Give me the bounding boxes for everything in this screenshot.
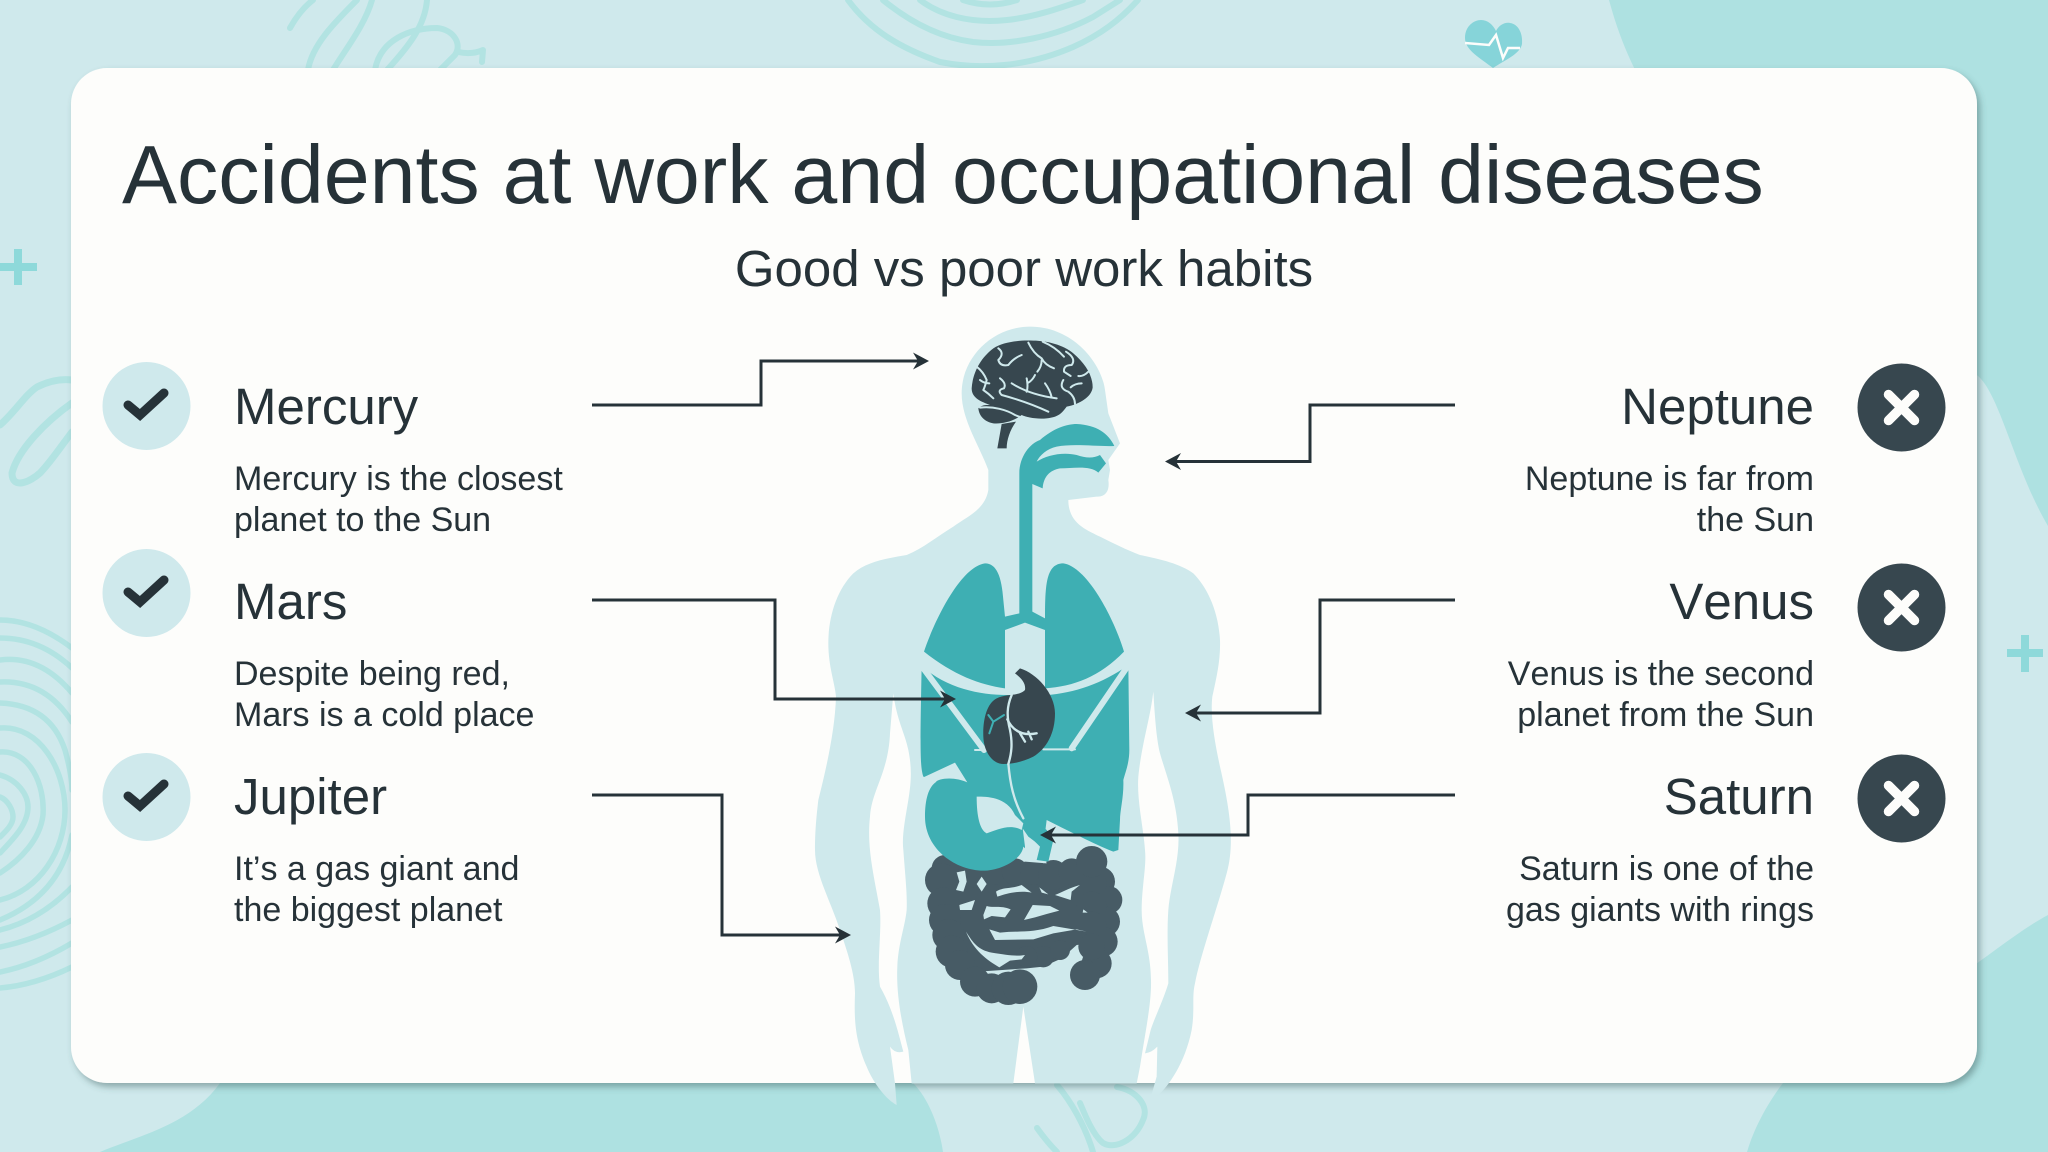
item: Venus [1508, 564, 1946, 734]
description: planet to the Sun [234, 501, 491, 539]
arrow: Venus to arm [1185, 600, 1455, 722]
heading: Jupiter [234, 768, 387, 825]
title: Accidents at work and occupational diseases [122, 129, 1764, 221]
description: Neptune is far from [1525, 460, 1814, 498]
lungs [924, 563, 1124, 688]
heart organ [983, 668, 1055, 764]
item: Saturn [1506, 754, 1946, 929]
heading: Saturn [1664, 768, 1814, 825]
liver and stomach [921, 665, 1129, 877]
description: Despite being red, [234, 655, 510, 693]
description: planet from the Sun [1517, 696, 1814, 734]
icon: cross [1858, 754, 1946, 842]
subtitle: Good vs poor work habits [735, 240, 1313, 297]
description: Venus is the second [1508, 655, 1814, 693]
icon: check [102, 549, 190, 637]
body silhouette [815, 327, 1231, 1105]
arrow: Neptune to mouth [1165, 405, 1455, 470]
description: It’s a gas giant and [234, 850, 519, 888]
heading: Neptune [1621, 378, 1814, 435]
human body illustration [815, 327, 1231, 1105]
heading: Venus [1669, 573, 1814, 630]
brain [972, 341, 1093, 448]
icon: plus right [2007, 635, 2043, 672]
description: the biggest planet [234, 891, 503, 929]
icon: heart bottom [1387, 104, 1444, 152]
icon: cross [1858, 364, 1946, 452]
arrow: Jupiter to arm [592, 795, 851, 944]
icon: check [102, 753, 190, 841]
arrow: Mercury to brain [592, 352, 929, 405]
icon: check [102, 362, 190, 450]
right connector arrows [1040, 405, 1455, 844]
item: Mercury [102, 362, 563, 539]
trachea and airways [1005, 424, 1114, 630]
left connector arrows [592, 352, 956, 944]
icon: plus left [0, 249, 37, 285]
description: Mercury is the closest [234, 460, 563, 498]
description: Mars is a cold place [234, 696, 534, 734]
item: Neptune [1525, 364, 1946, 539]
heading: Mercury [234, 378, 419, 435]
item: Jupiter [102, 753, 519, 929]
item: Mars [102, 549, 534, 734]
icon: cross [1858, 564, 1946, 652]
arrow: Saturn to organ [1040, 795, 1455, 844]
description: Saturn is one of the [1519, 850, 1814, 888]
description: gas giants with rings [1506, 891, 1814, 929]
icon: heart top [1465, 20, 1522, 68]
arrow: Mars to torso [592, 600, 956, 708]
heading: Mars [234, 573, 347, 630]
intestines [925, 855, 1122, 1005]
description: the Sun [1697, 501, 1814, 539]
